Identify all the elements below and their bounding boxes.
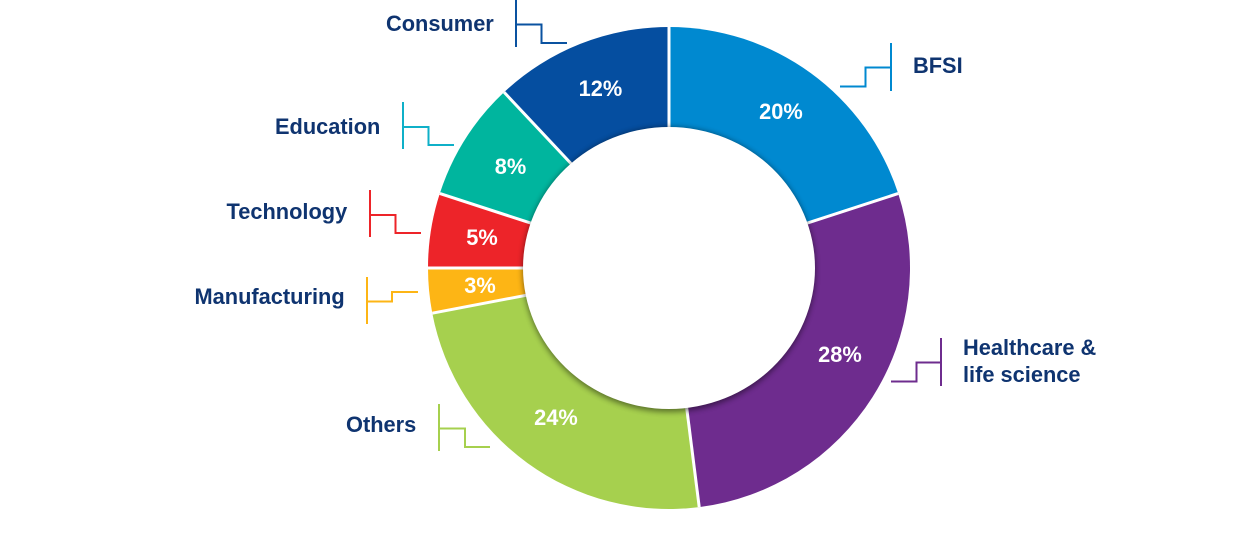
label: Manufacturing: Manufacturing <box>194 284 345 309</box>
percent: 5%: 5% <box>466 225 498 250</box>
segment: Education 8% <box>440 92 669 268</box>
segment: Manufacturing 3% <box>428 268 669 313</box>
leader: Manufacturing <box>367 277 418 324</box>
label: Healthcare and life science: life science <box>963 362 1081 387</box>
segment: Others 24% <box>432 268 699 509</box>
segment: Technology 5% <box>428 194 669 268</box>
segment: Consumer 12% <box>504 27 669 268</box>
label: Healthcare and life science: Healthcare & <box>963 335 1097 360</box>
label: Education: Education <box>275 114 380 139</box>
label: Consumer: Consumer <box>386 11 494 36</box>
percent: 28%: 28% <box>818 342 862 367</box>
segment: BFSI 20% <box>669 27 898 268</box>
leader: Consumer <box>516 0 567 47</box>
percent: 8%: 8% <box>495 154 526 179</box>
leader: Healthcare <box>891 338 941 386</box>
donut ring segments <box>428 27 910 509</box>
leader: Education <box>403 102 454 149</box>
label: Others: Others <box>346 412 416 437</box>
label: Technology: Technology <box>226 199 347 224</box>
donut chart infographic <box>196 0 1096 509</box>
donut hole <box>523 127 815 409</box>
leader: BFSI <box>840 43 891 91</box>
percent: 24%: 24% <box>534 405 578 430</box>
leader: Technology <box>370 190 421 237</box>
percent: 3%: 3% <box>464 273 496 298</box>
leader: Others <box>439 404 490 451</box>
percent: 12%: 12% <box>579 76 622 101</box>
segment: Healthcare 28% <box>669 194 910 507</box>
percent: 20%: 20% <box>759 99 803 124</box>
label: BFSI: BFSI <box>913 53 963 78</box>
